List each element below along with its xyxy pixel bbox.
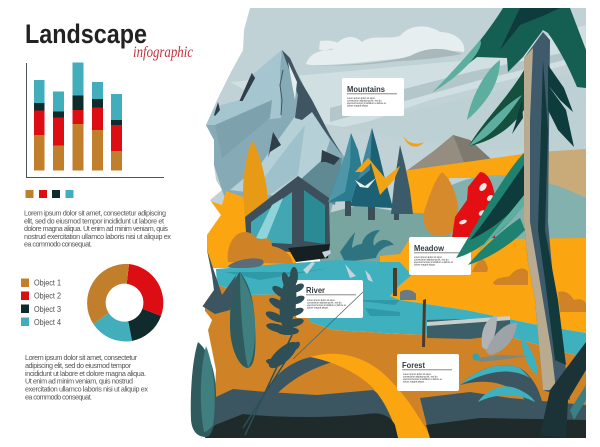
hook shadow [267,357,330,393]
bar 2 [53,92,64,170]
dragonfly [472,315,528,362]
meadow bushes [472,260,586,312]
callout: Forest: Forest [402,360,425,370]
log top [427,316,510,326]
grass tuft [340,230,394,262]
landscape illustration [191,8,590,438]
left dark plant [202,250,236,314]
text block 1: elit, sed do eiusmod tempor incididunt ut labore et [24,216,164,225]
text block 2 [25,353,148,402]
callout: Mountains: Lorem ipsum dolor sit amet, [347,97,376,100]
stacked bar chart [26,62,164,178]
text block 1 [24,208,171,249]
orange leaf tree [424,172,458,236]
lower pine branches [456,153,525,265]
text block 2: exercitation ullamco laboris nisi ut aliquip ex [25,385,148,394]
callout: Meadow: Lorem ipsum dolor sit amet, [414,256,443,259]
bar 4 [92,82,103,170]
river [216,260,586,358]
callout: Forest: consectetur adipiscing elit, sed do [403,376,438,378]
callout: Meadow [409,237,471,275]
callout: Forest: Lorem ipsum dolor sit amet, [403,373,432,376]
callout: Meadow: eiusmod tempor incididunt ut labore et [414,261,453,264]
callout: River: River [306,285,326,295]
wheat [243,267,363,435]
donut legend: Object 1 [34,278,61,288]
cattails [393,268,426,347]
donut legend: Object 3 [34,305,61,314]
right river bank [427,318,510,339]
bottom ground right [420,392,586,438]
house [245,176,330,262]
callout: Mountains: dolore magna aliqua. [347,104,369,108]
foreground leaf [191,342,216,437]
bar chart colour key [26,190,74,198]
text block 2: ea commodo consequat. [25,392,92,402]
bar 3 [72,62,84,170]
callout: Forest: dolore magna aliqua. [403,380,425,384]
mountain [206,50,344,215]
red leaf tree [452,172,497,238]
text block 2: adipiscing elit, sed do eiusmod tempor [25,361,132,370]
leaf holes [459,182,494,225]
fish [303,250,373,282]
callout: River: dolore magna aliqua. [307,306,329,310]
callout: Forest: eiusmod tempor incididunt ut labore et [403,378,442,381]
text block 1: ea commodo consequat. [24,240,92,249]
callout: Mountains: eiusmod tempor incididunt ut labore et [347,102,386,105]
text block 1: dolore magna aliqua. Ut enim ad minim veniam, quis [24,224,168,233]
title: Landscape [25,19,147,49]
callout: Mountains [342,78,404,116]
callout: Meadow: Meadow [414,243,444,253]
clouds [306,26,464,66]
left bright bushes [205,191,296,268]
orange tree [243,141,268,217]
callout: River: consectetur adipiscing elit, sed do [307,302,342,304]
callout: Forest [397,354,459,391]
pine trees [328,128,413,220]
callout: Meadow: consectetur adipiscing elit, sed do [414,258,449,262]
callout: River [296,280,363,318]
callout: Mountains: consectetur adipiscing elit, sed do [347,100,382,102]
big leaf [230,272,255,368]
yellow path [310,354,432,438]
subtitle: infographic [133,44,193,61]
river stone [400,290,416,300]
callout: Mountains: Mountains [347,84,385,94]
meadow [380,238,586,333]
donut chart [87,264,163,341]
text block 1: Lorem ipsum dolor sit amet, consectetur adipiscing [24,208,166,218]
dark hill [205,389,402,438]
brown ground [205,285,586,438]
callout: River: eiusmod tempor incididunt ut labore et [307,304,346,307]
title [25,19,193,61]
callout: River: Lorem ipsum dolor sit amet, [307,299,336,302]
bar 5 [111,94,122,170]
left orange bush [228,232,293,264]
bar 1 [34,80,44,170]
callout: Meadow: dolore magna aliqua. [414,264,436,266]
stone [228,258,264,268]
donut legend: Object 4 [34,318,61,327]
text block 2: Lorem ipsum dolor sit amet, consectetur [25,353,138,362]
pine foliage [433,8,586,147]
dark ground [205,413,586,438]
pine trunk [524,32,570,400]
text block 2: incididunt ut labore et dolore magna aliqua. [25,369,146,378]
far ground [320,149,586,262]
donut legend [21,278,61,327]
sky [200,8,590,248]
text block 2: Ut enim ad minim veniam, quis nostrud [25,377,133,386]
foreground plant [460,337,586,438]
river highlights [225,268,400,316]
distant hill [405,135,492,172]
text block 1: nostrud exercitation ullamco laboris nisi ut aliquip ex [24,232,171,241]
flying birds and leaves [355,134,424,195]
donut legend: Object 2 [34,292,61,301]
